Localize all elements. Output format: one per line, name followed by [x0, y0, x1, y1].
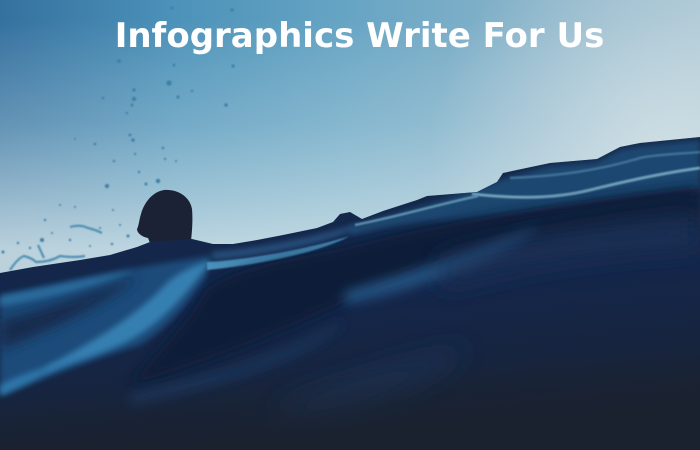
mid crest shimmer [207, 236, 350, 270]
deep water at the bottom [278, 388, 398, 432]
dark swell [130, 186, 700, 385]
top left shimmer [0, 270, 135, 306]
left wave body [0, 256, 210, 396]
title: Infographics Write For Us [115, 16, 604, 56]
lower left shimmer [0, 364, 58, 398]
ocean wave [0, 137, 700, 450]
water droplets [2, 6, 235, 254]
water splash [10, 226, 102, 270]
upper right crest [350, 140, 700, 236]
swimmer head silhouette [137, 190, 192, 243]
crest highlight [472, 168, 700, 197]
left bright streak [45, 260, 212, 372]
dim mid shimmer [345, 226, 540, 304]
left dark streak [0, 276, 140, 350]
